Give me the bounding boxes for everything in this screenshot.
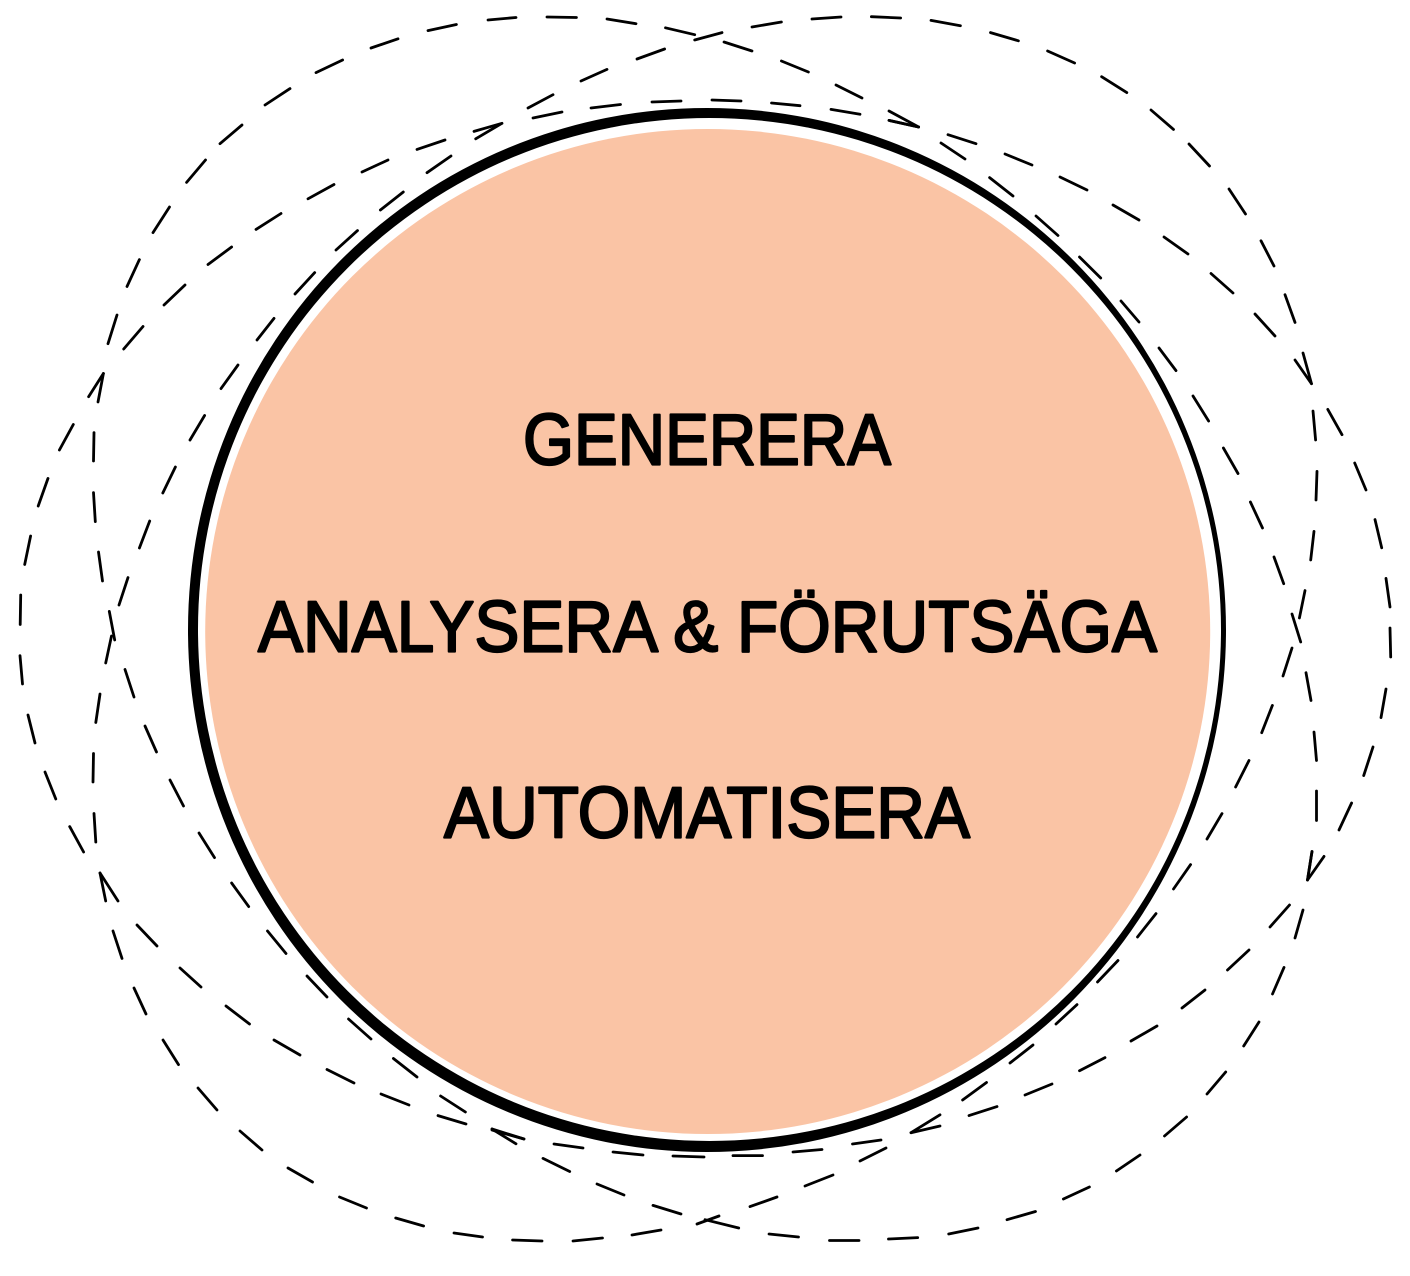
label: AUTOMATISERA: AUTOMATISERA — [444, 774, 970, 854]
outer circle: hand-drawn black ring — [188, 108, 1226, 1152]
label: GENERERA: GENERERA — [523, 400, 891, 480]
inner circle: peach fill — [205, 129, 1210, 1134]
dashed orbit: right inner loop — [492, 120, 1317, 1139]
label: ANALYSERA & FÖRUTSÄGA: ANALYSERA & FÖRUTSÄGA — [258, 588, 1157, 668]
